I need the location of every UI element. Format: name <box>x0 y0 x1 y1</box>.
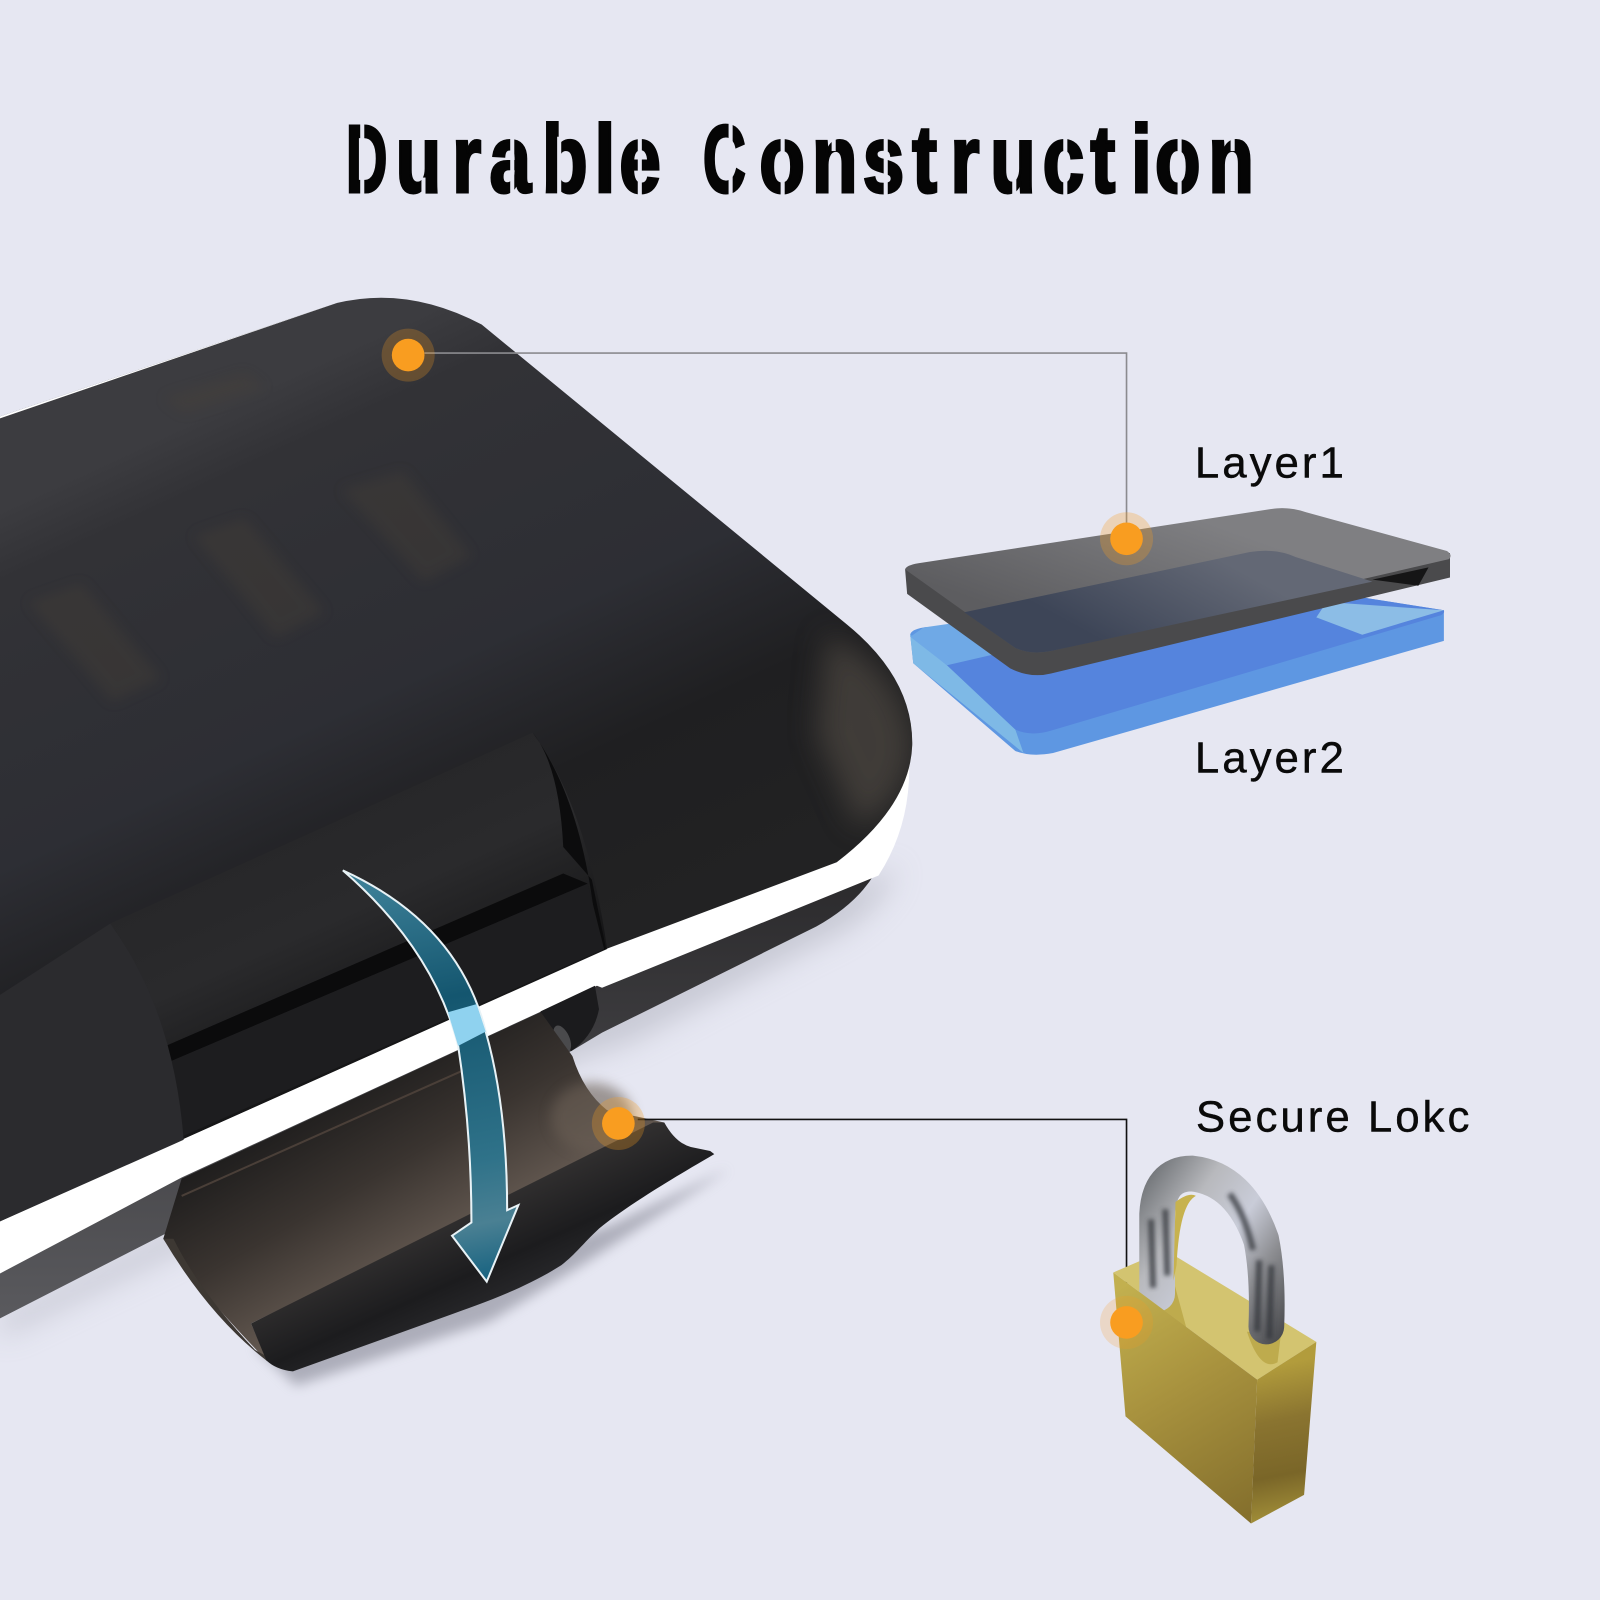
title <box>346 105 1254 213</box>
plate left edge <box>910 635 1023 753</box>
case shadow <box>0 867 898 1337</box>
marker: layer 1 <box>1100 512 1153 565</box>
leader line: lid to layer 1 <box>424 353 1127 522</box>
layer 1 dark plate <box>905 508 1451 675</box>
lid details <box>0 299 913 827</box>
leader line: latch to lock <box>638 1119 1127 1308</box>
marker: latch <box>592 1097 645 1150</box>
arrow: flap opens downward <box>343 870 518 1282</box>
flap fold line <box>182 1069 465 1196</box>
lock front face <box>1113 1272 1257 1523</box>
latch lower panel <box>168 884 604 1137</box>
title: urable <box>396 106 661 213</box>
flap shadow <box>255 1168 730 1386</box>
left side panel <box>0 923 184 1221</box>
plate edge glint <box>1372 567 1429 586</box>
cover right shadow crease <box>533 733 606 951</box>
brown corner tint <box>816 633 913 827</box>
lid top <box>0 298 912 1221</box>
label layer 2: Layer2 <box>1195 733 1344 782</box>
label layer 1: Layer1 <box>1195 439 1344 488</box>
latch cover <box>0 733 607 1221</box>
title: onstruction <box>759 106 1254 213</box>
flap side curve <box>163 1239 294 1371</box>
groove <box>163 873 588 1062</box>
arrow over white strip <box>448 1004 486 1046</box>
arrow body <box>343 870 518 1282</box>
plate surface <box>910 592 1444 733</box>
flap inner highlight <box>551 1083 633 1152</box>
plate window <box>964 551 1372 653</box>
lock top face <box>1113 1250 1316 1380</box>
white rim glint <box>0 299 337 418</box>
layer diagram <box>905 439 1451 782</box>
marker: lid <box>382 329 435 382</box>
translucent compartments <box>29 372 471 702</box>
padlock <box>1113 1093 1469 1523</box>
plate body <box>910 592 1444 755</box>
gold shackle reflections <box>1148 1281 1281 1364</box>
shackle dark reflections <box>1151 1194 1271 1339</box>
product: storage case with open latch <box>0 298 913 1386</box>
flap lip <box>251 1122 714 1371</box>
plate side <box>905 553 1450 675</box>
lock side face <box>1251 1342 1316 1523</box>
layer 2 blue plate <box>910 592 1444 755</box>
label secure lock: Secure Lokc <box>1196 1093 1469 1142</box>
plate top <box>905 508 1451 653</box>
white seal strip <box>0 765 909 1273</box>
lower shell <box>0 857 883 1318</box>
title: C <box>703 105 746 212</box>
plate top-right clear corner <box>1316 602 1444 635</box>
cover body <box>110 733 607 1140</box>
flap inner face <box>163 1012 664 1361</box>
gold inner sliver <box>1173 1195 1196 1281</box>
hinge under seal <box>533 986 599 1051</box>
title: D <box>346 105 387 212</box>
hinge pin <box>550 1023 575 1055</box>
shackle <box>1157 1173 1267 1327</box>
flap <box>163 986 714 1371</box>
marker: lock <box>1100 1296 1153 1349</box>
